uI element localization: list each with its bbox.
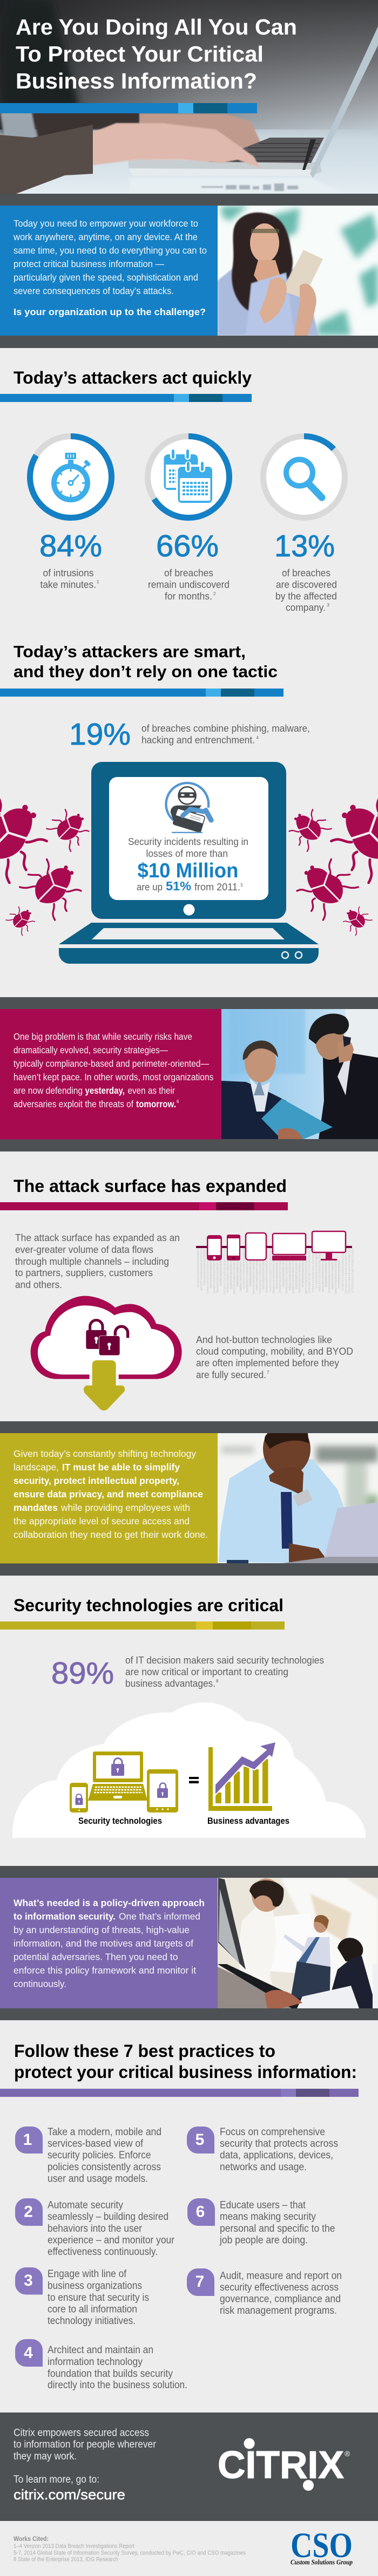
practice 7: risk management programs. [220,2305,337,2316]
grey band [0,194,378,348]
practice 3: to ensure that security is [48,2292,149,2304]
stat: 89% of IT decision makers: business advantages. [125,1678,215,1689]
stat: 13% of breaches: company. [286,602,326,613]
panel: one big problem: typically compliance-based and perimeter-oriented— [14,1058,209,1069]
panel: policy-driven approach: by an understanding of threats, high-value [14,1924,190,1935]
practice 7: security effectiveness across [220,2282,339,2293]
panel: policy-driven approach: to information security. [14,1911,116,1922]
stat: 84% of intrusions: 1 [97,580,99,584]
binary data columns: 011001010111001010010 [265,1260,268,1293]
heading: 7 best practices [0,2041,359,2097]
text: citrix call to action: Citrix empowers secured access [14,2427,149,2439]
binary data columns: 101110100101011001010 [281,1260,285,1287]
panel: policy-driven approach: enforce this policy framework and monitor it [14,1965,196,1976]
practice 6: job people are doing. [219,2235,308,2246]
callout: $10 million: 51% [166,879,191,893]
logo: cso custom solutions group: CSO [291,2526,353,2565]
binary data columns: 010111010100101110010 [334,1260,338,1294]
practice 1: services-based view of [48,2138,144,2150]
binary data columns: 001010011101001011100 [304,1260,308,1294]
panel: intro [0,206,218,336]
text: hot-button technologies: are fully secured. [196,1369,266,1380]
binary data columns: 011100101001011010110001 [206,1249,210,1294]
panel: intro: work anywhere, anytime, on any device. At the [13,231,198,242]
panel: intro: particularly given the speed, sophistication and [14,272,198,283]
stat: 13% of breaches: are discovered [276,578,337,590]
practice 5: data, applications, devices, [220,2150,333,2161]
stat: 19% of breaches combine: of breaches combine phishing, malware, [141,723,310,734]
cloud labels: Security technologies [78,1816,162,1826]
binary data columns: 101001110101001011010 [252,1260,255,1294]
stat: 13% of breaches: 3 [327,603,329,608]
stat: 84% of intrusions: of intrusions [43,567,94,578]
binary data columns: 001011010100111001011 [219,1260,222,1287]
stat: 19% of breaches combine: 4 [256,735,259,740]
binary data columns: 100101110100101011100 [232,1260,236,1294]
practice 1: user and usage models. [48,2173,148,2184]
stat: 89% of IT decision makers: are now critical or important to creating [125,1666,288,1677]
binary data columns: 101001010111001011010 [298,1260,301,1293]
practice 7 [187,2268,342,2316]
stat: 84% of intrusions: 84% [39,529,102,563]
practice 4: 4 [24,2344,33,2362]
equals sign [189,1777,199,1783]
binary data columns: 001110010100110101011 [248,1260,252,1288]
practice 4: foundation that builds security [48,2368,173,2380]
binary data columns: 100101011100101101001 [288,1260,292,1291]
panel: policy-driven approach: One that’s informed [119,1911,200,1922]
text: hot-button technologies: And hot-button technologies like [196,1334,332,1345]
callout: $10 million: are up [137,881,163,892]
practice 5: security that protects across [220,2138,338,2150]
stat: 89% of IT decision makers: 8 [216,1679,219,1684]
heading: today's attackers are smart: and they don’t rely on one tactic [14,662,278,681]
works cited: 1–4 Verizon 2013 Data Breach Investigations Report [14,2543,134,2550]
heading: attack surface: The attack surface has expanded [14,1176,287,1196]
practice 2: 2 [24,2203,33,2221]
binary data columns: 010101110010100101110100 [199,1249,203,1291]
panel: intro: protect critical business information — [14,258,164,269]
panel: simplify security: mandates [14,1502,58,1513]
stat: 66% of breaches: 66% [156,529,219,563]
grey band [0,1421,378,1576]
works cited [14,2536,246,2563]
stat: 89% of IT decision makers [51,1654,324,1691]
binary data columns: 100101101010111001010011 [202,1249,206,1286]
binary data columns: 011010100101110010100 [321,1260,325,1292]
panel: one big problem: tomorrow. [136,1099,176,1109]
binary data columns: 010010111001010110100101 [242,1249,246,1290]
binary data columns: 110010101010010111100100 [196,1249,200,1287]
icon: swarm of bugs [0,796,378,936]
stat: 66% of breaches: remain undiscoverd [148,578,230,590]
practice 6: 6 [196,2203,205,2221]
stat: 66% of breaches: for months. [165,590,212,602]
stat: 13% of breaches [264,436,345,613]
practice 3: technology initiatives. [48,2315,136,2327]
practice 2: experience – and monitor your [48,2235,175,2246]
panel: policy-driven approach: continuously. [14,1978,66,1989]
icon: magnifying glass [286,460,322,498]
binary data columns: 001011101001010011010 [327,1260,331,1293]
works cited: Works Cited: [14,2536,49,2543]
binary data columns [196,1249,354,1296]
panel: simplify security: the appropriate level of secure access and [14,1516,190,1526]
binary data columns: 100111010100101011100 [261,1260,265,1290]
practice 6 [187,2198,335,2246]
panel: intro: same time, you need to do everything you can to [14,245,207,256]
heading: security technologies: Security technologies are critical [14,1596,284,1615]
panel: simplify security: ensure data privacy, and meet compliance [14,1489,203,1500]
binary data columns: 110010111010010101001 [294,1260,298,1290]
binary data columns: 011010010111001010011 [235,1260,239,1288]
text: citrix call to action [14,2427,157,2503]
practice 3: core to all information [48,2304,137,2315]
practice 1 [15,2127,161,2184]
practice 2: effectiveness continuously. [48,2246,158,2258]
heading: today's attackers act quickly: Today’s attackers act quickly [14,368,252,387]
title [16,15,297,93]
text: citrix call to action: To learn more, go to: [14,2474,99,2485]
panel: one big problem: even as their [127,1085,175,1096]
icon: stopwatch [54,453,91,500]
icon: calendars [164,449,214,505]
stat: 89% of IT decision makers: of IT decision makers said security technologies [125,1654,324,1666]
white cloud [12,1702,366,1838]
binary data columns: 110101001011100101001 [245,1260,249,1293]
binary data columns: 010111001010011100101 [212,1260,216,1294]
callout: $10 million: Security incidents resulting in [128,836,248,847]
grey band [0,997,378,1151]
binary data columns: 010111001010011010010111 [350,1249,354,1293]
stat: 84% of intrusions: take minutes. [40,578,96,590]
practice 4 [15,2339,187,2391]
heading: attack surface [0,1176,288,1210]
panel: one big problem: yesterday, [85,1085,125,1096]
heading: today's attackers act quickly [0,368,252,402]
photo: woman with tablet [218,206,378,336]
text: attack surface paragraph: and others. [15,1279,62,1290]
binary data columns: 110010100101110100101 [344,1253,348,1294]
practice 4: directly into the business solution. [48,2380,187,2391]
practice 3: 3 [24,2272,33,2289]
photo: two businessmen with tablet [221,1009,378,1139]
icon: secure devices [70,1752,178,1812]
works cited: 5-7, 2014 Global State of Information Security Survey, conducted by PwC, CIO and CSO magazines [14,2550,246,2557]
practice 2: seamlessly – building desired [48,2211,168,2223]
panel: simplify security: collaboration they need to get their work done. [14,1529,208,1540]
practice 5: Focus on comprehensive [220,2127,325,2138]
logo: citrix: CITRIX [218,2444,344,2486]
cloud labels [78,1816,289,1826]
icon: thief with credit card [166,783,211,833]
icon: cloud with locks and download arrow [31,1296,182,1410]
practice 3: Engage with line of [48,2268,127,2280]
panel: intro: Is your organization up to the challenge? [14,306,206,317]
stat: 84% of intrusions [30,436,111,590]
panel: one big problem: 6 [177,1099,179,1104]
binary data columns: 011101001010011100101 [291,1260,295,1294]
stat: 13% of breaches: by the affected [275,590,337,602]
title: Business Information? [16,69,257,93]
text: attack surface paragraph [15,1232,180,1290]
callout: $10 million: losses of more than [146,848,228,859]
panel: one big problem: adversaries exploit the threats of [14,1099,133,1109]
binary data columns: 101011001010011101001 [239,1260,242,1292]
binary data columns: 110100101011100101001 [324,1260,328,1288]
panel: simplify security [0,1433,218,1564]
binary data columns: 111001010011010100101 [229,1260,233,1290]
practice 6: Educate users – that [220,2199,306,2211]
text: hot-button technologies [196,1334,353,1380]
text: attack surface paragraph: ever-greater volume of data flows [15,1244,153,1255]
practice 4: information technology [48,2356,143,2368]
practice 1: security policies. Enforce [48,2150,151,2161]
binary data columns: 010110101001011100101 [272,1260,275,1294]
panel: one big problem: dramatically evolved, security strategies— [14,1045,168,1055]
binary data columns: 110100101010011100101 [275,1260,279,1290]
footer panel [0,2413,378,2521]
practice 7: governance, compliance and [220,2293,341,2305]
panel: one big problem: are now defending [14,1085,83,1096]
stat: 66% of breaches: 2 [213,591,216,596]
heading: today's attackers are smart [0,642,284,697]
title: Are You Doing All You Can [16,15,297,39]
panel: simplify security: security, protect intellectual property, [14,1475,179,1486]
panel: simplify security: Given today’s constantly shifting technology [14,1448,196,1459]
practice 5: networks and usage. [220,2162,307,2173]
title: To Protect Your Critical [16,42,264,66]
binary data columns: 100100101110101001011 [337,1260,341,1289]
panel: one big problem: One big problem is that while security risks have [14,1031,192,1042]
heading: today's attackers are smart: Today’s attackers are smart, [14,642,246,661]
photo: team meeting [218,1878,378,2008]
icon: laptop [59,762,319,964]
practice 7: Audit, measure and report on [220,2271,342,2281]
binary data columns: 101110010101001011100101 [222,1249,226,1296]
stat: 19% of breaches combine: 19% [69,717,131,752]
binary data columns: 010010101110010100111 [314,1253,318,1289]
stat: 66% of breaches: of breaches [164,567,213,578]
icon: connected devices [196,1231,352,1260]
stat: 19% of breaches combine: hacking and entrenchment. [141,734,255,746]
practice 3: business organizations [48,2280,142,2292]
panel: policy-driven approach: information, and the motives and targets of [14,1938,193,1949]
binary data columns: 001011100101001101010 [278,1260,282,1293]
binary data columns: 010111001010100101110 [301,1260,305,1287]
binary data columns: 101010011100101101001 [330,1260,334,1290]
cloud labels: Business advantages [207,1816,289,1826]
heading: 7 best practices: protect your critical business information: [14,2062,357,2082]
photo: man at laptop [218,1422,378,1563]
stat: 19% of breaches combine [69,717,310,752]
heading: security technologies [0,1596,285,1630]
panel: policy-driven approach: potential adversaries. Then you need to [14,1951,178,1962]
text: hot-button technologies: cloud computing, mobility, and BYOD [196,1346,353,1357]
binary data columns: 010100101110010100111 [285,1260,288,1294]
binary data columns: 101100101001011101001 [318,1253,321,1292]
binary data columns: 101010010111001010011001 [268,1249,272,1292]
binary data columns: 110010100111010010101 [258,1260,262,1294]
panel: one big problem [0,1009,221,1140]
panel: simplify security: landscape, [14,1462,59,1473]
binary data columns: 101001011100101001101011 [347,1249,351,1294]
binary data columns: 110100101110010101001 [215,1260,219,1293]
panel: one big problem: haven’t kept pace. In other words, most organizations [14,1072,214,1082]
binary data columns: 010100111001011010101 [226,1260,230,1293]
text: attack surface paragraph: The attack surface has expanded as an [15,1232,180,1243]
practice 1: Take a modern, mobile and [48,2127,161,2138]
practice 6: means making security [220,2211,316,2223]
stat: 89% of IT decision makers: 89% [51,1656,114,1691]
practice 2: behaviors into the user [48,2223,143,2234]
binary data columns: 010111010010101110010 [255,1260,259,1291]
grey band [0,1866,378,2020]
stat: 66% of breaches [148,436,230,602]
stat: 13% of breaches: of breaches [282,567,330,578]
text: attack surface paragraph: to partners, suppliers, customers [15,1267,153,1278]
panel: policy-driven approach [0,1878,218,2008]
icon: padlocks [76,1758,168,1805]
binary data columns: 011100101001011010011 [341,1253,345,1291]
panel: simplify security: IT must be able to simplify [62,1462,180,1473]
stat: 13% of breaches: 13% [274,529,335,563]
practice 7: 7 [195,2273,204,2291]
practice 3 [15,2267,149,2327]
practice 1: policies consistently across [48,2162,161,2173]
callout: $10 million: $10 Million [137,860,239,882]
practice 5 [187,2127,338,2173]
practice 4: Architect and maintain an [48,2345,153,2356]
practice 2: Automate security [48,2199,123,2211]
callout: $10 million: 5 [241,883,243,888]
text: hot-button technologies: 7 [267,1370,269,1375]
practice 1: 1 [23,2131,32,2149]
practice 2 [15,2198,175,2258]
binary data columns: 101001011100101011010 [209,1260,213,1289]
text: citrix call to action: citrix.com/secure [14,2486,125,2503]
panel: intro: Today you need to empower your workforce to [14,218,198,229]
chart: business advantages rising [208,1742,275,1811]
panel: policy-driven approach: What’s needed is a policy-driven approach [14,1897,205,1908]
heading: 7 best practices: Follow these 7 best practices to [14,2041,275,2061]
practice 6: personal and specific to the [220,2223,335,2234]
binary data columns: 110101001011100101001011 [307,1249,311,1293]
text: citrix call to action: they may work. [14,2451,77,2462]
text: attack surface paragraph: through multiple channels – including [15,1256,169,1267]
callout: $10 million: from 2011. [194,881,240,892]
text: hot-button technologies: are often implemented before they [196,1357,340,1368]
text: citrix call to action: to information for people wherever [14,2439,157,2450]
callout: $10 million [128,836,248,893]
logo: citrix: ® [345,2449,350,2458]
title colour bar [0,103,257,113]
logo: cso custom solutions group: Custom Solutions Group [291,2558,353,2566]
panel: intro: severe consequences of today’s attacks. [14,285,174,296]
binary data columns: 100101110100101011001 [311,1253,315,1293]
works cited: 8 State of the Enterprise 2013, IDG Research [14,2557,118,2563]
practice 5: 5 [195,2131,204,2149]
panel: simplify security: while providing employees with [60,1502,190,1513]
hero photo: hands typing on a laptop [0,0,378,194]
